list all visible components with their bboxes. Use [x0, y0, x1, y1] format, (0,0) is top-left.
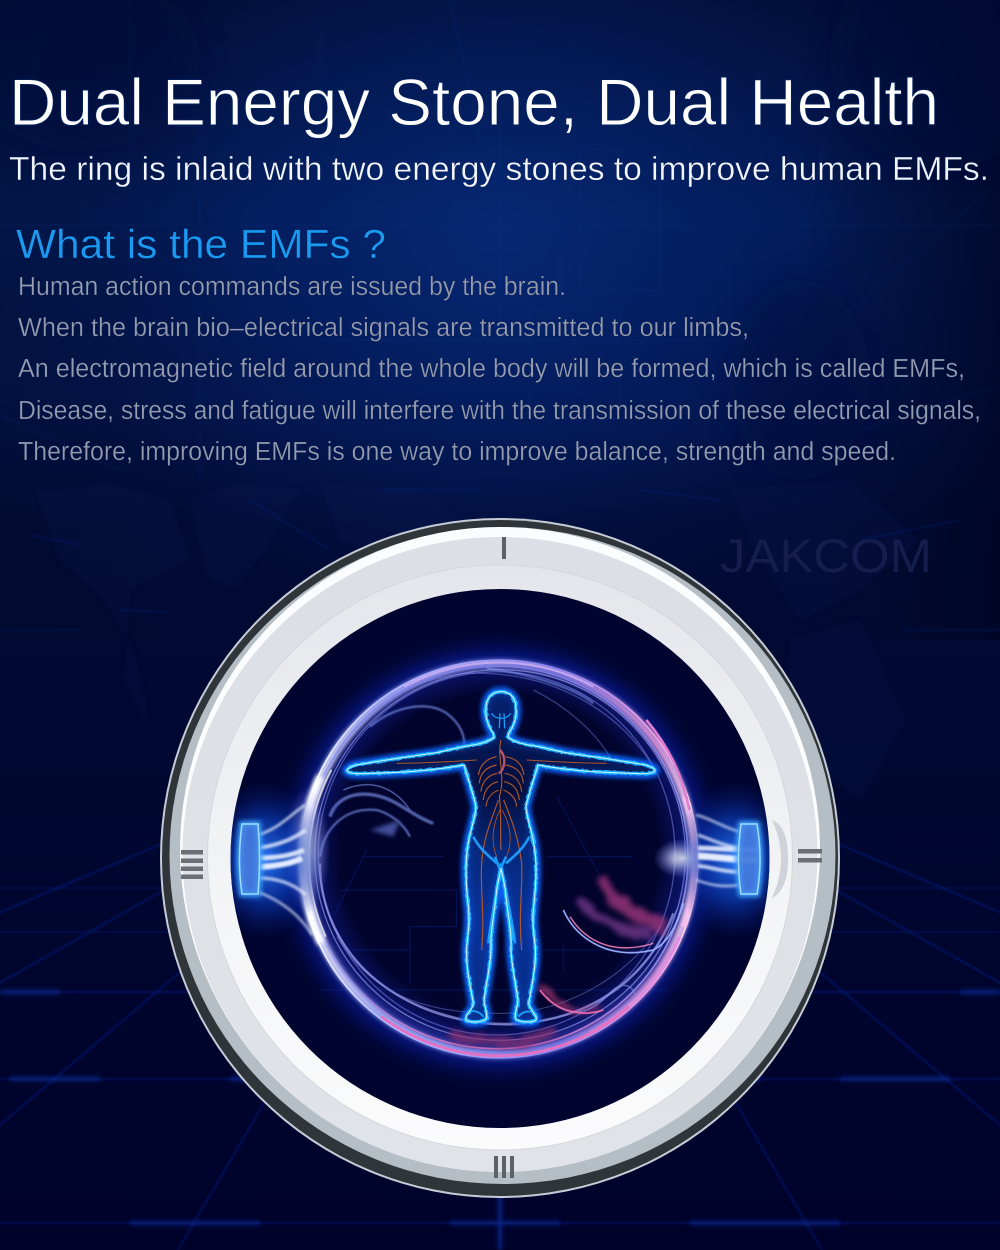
figure outer glow	[347, 692, 655, 1022]
ring illustration	[160, 518, 840, 1198]
swirling energy lines	[540, 903, 683, 1013]
explanatory text block: Disease, stress and fatigue will interfere with the transmission of these electrical signals,	[18, 397, 981, 425]
watermark: JAKCOM: JAKCOM	[720, 529, 932, 582]
subtitle: The ring is inlaid with two energy stones to improve human EMFs.	[9, 151, 989, 188]
background world map silhouettes	[36, 480, 920, 800]
explanatory text block: Human action commands are issued by the brain.	[18, 273, 566, 301]
figure body fill	[347, 692, 655, 1022]
explanatory text block: Therefore, improving EMFs is one way to improve balance, strength and speed.	[18, 438, 896, 466]
sphere halo	[266, 626, 732, 1092]
energy sphere with human figure	[266, 626, 732, 1092]
left energy stone and beams	[230, 786, 322, 936]
background perspective grid	[0, 490, 1000, 1250]
faint circuit lines inside sphere	[320, 797, 667, 990]
plasma wisps	[320, 668, 610, 857]
ring tick mark: III	[494, 1156, 514, 1178]
sphere interior	[302, 662, 696, 1056]
title: Dual Energy Stone, Dual Health	[9, 65, 939, 139]
sphere rims	[300, 660, 698, 1058]
bright flares on sphere edge	[283, 787, 713, 913]
ring tick mark: I	[502, 537, 506, 559]
human figure	[347, 692, 655, 1022]
pink plasma smoke	[450, 880, 663, 1043]
nervous system and ribcage	[397, 740, 607, 950]
explanatory text block: When the brain bio–electrical signals are transmitted to our limbs,	[18, 314, 749, 342]
heading: What is the EMFs ?: What is the EMFs ?	[16, 221, 386, 267]
ring tick mark: IIII	[181, 850, 203, 879]
figure electric outline	[347, 692, 655, 1022]
figure bright core line	[347, 692, 655, 1022]
ring body	[160, 518, 840, 1198]
ring tick mark: II	[798, 849, 822, 862]
explanatory text block	[18, 273, 981, 466]
right energy stone and beams	[675, 786, 770, 934]
figure inner leg and torso lines	[468, 713, 535, 1017]
explanatory text block: An electromagnetic field around the whole body will be formed, which is called EMFs,	[18, 355, 965, 383]
